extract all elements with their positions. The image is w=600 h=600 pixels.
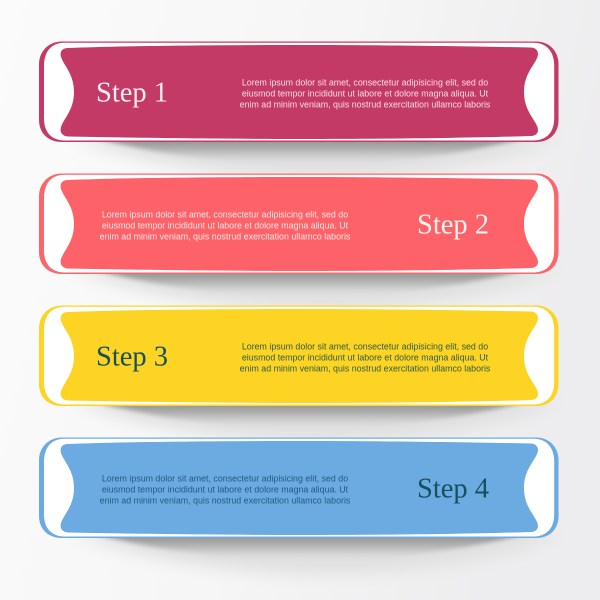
body text bbox=[100, 474, 351, 506]
body text: Lorem ipsum dolor sit amet, consectetur adipisicing elit, sed do bbox=[102, 210, 348, 220]
panel: step 2 bbox=[39, 174, 560, 310]
outer frame bbox=[39, 174, 558, 274]
body text bbox=[240, 78, 491, 110]
body text: enim ad minim veniam, quis nostrud exercitation ullamco laboris bbox=[100, 496, 351, 506]
body text: enim ad minim veniam, quis nostrud exercitation ullamco laboris bbox=[240, 364, 491, 374]
white inner frame bbox=[44, 175, 554, 272]
card shadow bbox=[70, 400, 560, 442]
body text: eiusmod tempor incididunt ut labore et dolore magna aliqua. Ut bbox=[242, 352, 489, 362]
heading: Step 3 bbox=[96, 341, 168, 372]
outer frame bbox=[39, 438, 558, 538]
colored label bbox=[61, 309, 538, 403]
body text: eiusmod tempor incididunt ut labore et dolore magna aliqua. Ut bbox=[242, 88, 489, 98]
panel: step 1 bbox=[39, 42, 560, 178]
card shadow bbox=[70, 268, 560, 310]
white inner frame bbox=[44, 43, 554, 140]
card shadow bbox=[70, 136, 560, 178]
colored label bbox=[61, 45, 538, 139]
body text bbox=[240, 342, 491, 374]
panel: step 3 bbox=[39, 306, 560, 442]
body text: enim ad minim veniam, quis nostrud exercitation ullamco laboris bbox=[100, 232, 351, 242]
body text: Lorem ipsum dolor sit amet, consectetur adipisicing elit, sed do bbox=[102, 474, 348, 484]
colored label bbox=[61, 177, 538, 271]
card shadow bbox=[70, 532, 560, 574]
white inner frame bbox=[44, 307, 554, 404]
heading: Step 2 bbox=[417, 209, 489, 240]
body text: eiusmod tempor incididunt ut labore et dolore magna aliqua. Ut bbox=[102, 484, 349, 494]
body text: Lorem ipsum dolor sit amet, consectetur adipisicing elit, sed do bbox=[242, 342, 488, 352]
heading: Step 1 bbox=[96, 77, 168, 108]
body text: Lorem ipsum dolor sit amet, consectetur adipisicing elit, sed do bbox=[242, 78, 488, 88]
outer frame bbox=[39, 42, 558, 142]
body text bbox=[100, 210, 351, 242]
panel: step 4 bbox=[39, 438, 560, 574]
body text: eiusmod tempor incididunt ut labore et dolore magna aliqua. Ut bbox=[102, 220, 349, 230]
body text: enim ad minim veniam, quis nostrud exercitation ullamco laboris bbox=[240, 100, 491, 110]
heading: Step 4 bbox=[417, 473, 489, 504]
outer frame bbox=[39, 306, 558, 406]
colored label bbox=[61, 441, 538, 535]
white inner frame bbox=[44, 439, 554, 536]
